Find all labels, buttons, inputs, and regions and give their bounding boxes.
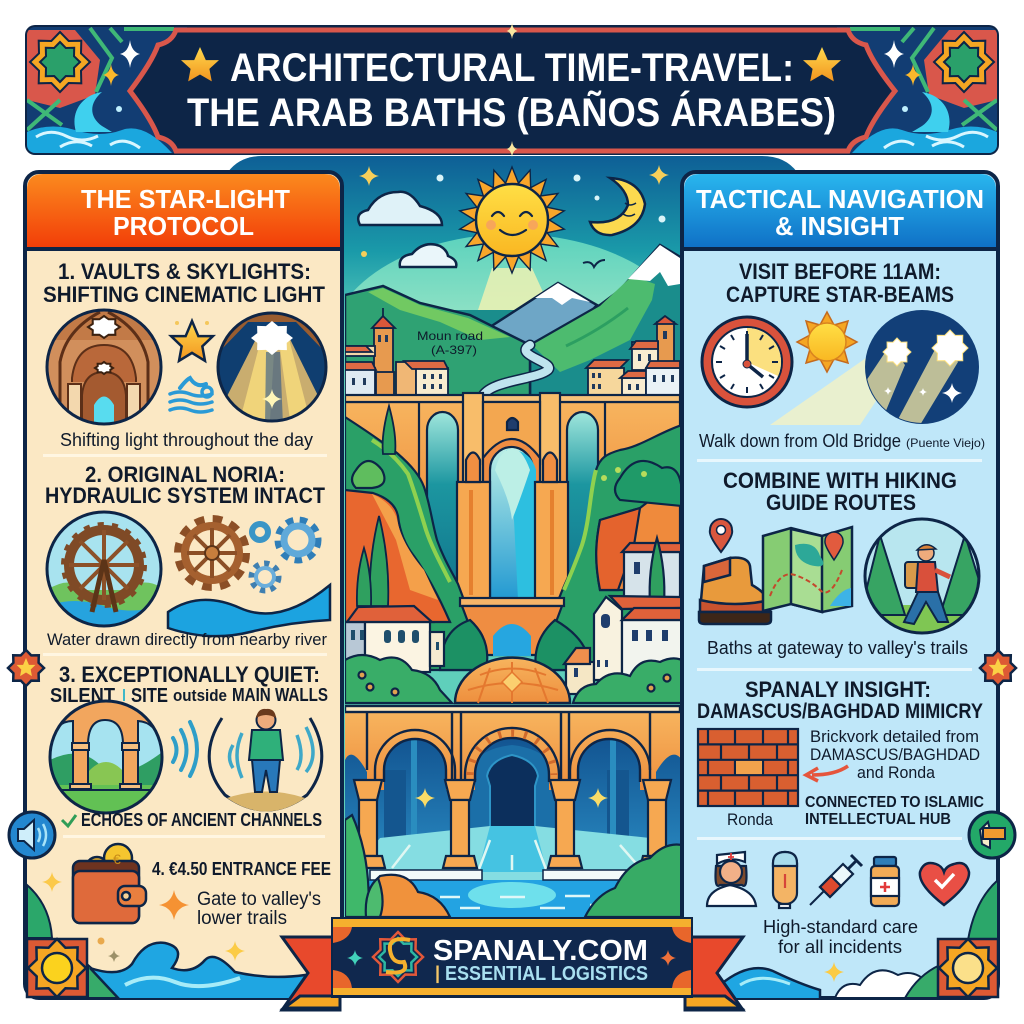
medallion: direction sign icon (969, 812, 1015, 858)
banner plate (331, 917, 693, 998)
title text: THE ARAB BATHS (BAÑOS ÁRABES) (187, 89, 836, 135)
section 4 text: 4. €4.50 ENTRANCE FEE (152, 859, 331, 879)
road label: (A-397) (431, 343, 477, 357)
sky sparkles (359, 165, 669, 257)
insight notes: DAMASCUS/BAGHDAD (810, 745, 980, 764)
section heading: hiking guide routes: COMBINE WITH HIKING (723, 468, 957, 493)
insight notes (805, 727, 984, 828)
icon: clock (702, 317, 792, 407)
section heading: visit before 11am: CAPTURE STAR-BEAMS (726, 282, 954, 307)
section 2 heading: HYDRAULIC SYSTEM INTACT (45, 483, 325, 508)
section heading: spanaly insight (697, 677, 983, 723)
section 3 heading: SILENT (50, 685, 115, 707)
caption 1: Shifting light throughout the day (60, 430, 313, 450)
section 2 heading (45, 462, 325, 508)
section 3 heading: MAIN WALLS (232, 685, 328, 705)
town right (586, 316, 680, 398)
caption: high-standard care: High-standard care (763, 917, 918, 937)
icon: hiker in forest (860, 519, 990, 635)
section 3 heading: outside (173, 686, 227, 705)
sunlight glow (353, 236, 640, 310)
panel header: THE STAR-LIGHT (81, 184, 290, 214)
icon: noria wheel (47, 512, 165, 630)
icon: sound waves (173, 722, 197, 776)
icon: vault interior (47, 310, 161, 429)
title plaque (130, 30, 895, 151)
section 1 heading (43, 259, 326, 307)
road label: Moun road (417, 329, 483, 343)
panel frame (682, 172, 998, 998)
icon: listening person (209, 709, 322, 812)
banner sparkles (347, 950, 676, 966)
icon: light beams in vault (215, 312, 330, 425)
section heading: hiking guide routes (723, 468, 957, 515)
section 3 heading: 3. EXCEPTIONALLY QUIET: (59, 662, 320, 687)
foreground plants (345, 815, 682, 917)
caption: old bridge: Walk down from Old Bridge (699, 431, 901, 451)
section 3 heading: SITE (131, 685, 168, 707)
panel frame (25, 172, 342, 998)
white stars and bird (436, 174, 666, 267)
icon: wallet with coins: € (113, 851, 121, 867)
section heading: spanaly insight: SPANALY INSIGHT: (745, 677, 931, 702)
town windows left (352, 335, 442, 389)
section heading: visit before 11am (726, 259, 954, 307)
caption: high-standard care (763, 917, 918, 957)
insight notes: Brickvork detailed from (810, 727, 979, 746)
sparkle (824, 962, 844, 982)
icon: hiking boot (699, 558, 771, 624)
title stars (181, 47, 841, 81)
center illustration: Ronda bridge and Arab Baths (228, 156, 797, 920)
insight notes: INTELLECTUAL HUB (805, 811, 951, 828)
section heading: spanaly insight: DAMASCUS/BAGHDAD MIMICRY (697, 700, 983, 723)
section 4 text: lower trails (197, 908, 287, 929)
crescent moon (590, 178, 645, 235)
icon: trail map (763, 527, 852, 612)
right mountain (530, 245, 682, 400)
icon: brick wall (698, 729, 798, 806)
light beam reaching panel (770, 358, 880, 425)
icon: location pin (710, 519, 732, 552)
caption: gateway: Baths at gateway to valley's trails (707, 638, 968, 658)
header corner ornament left (27, 27, 187, 153)
town windows right (592, 331, 674, 390)
title banner (25, 23, 999, 157)
spanaly logo (373, 932, 423, 982)
bushes (345, 655, 682, 703)
icon: water waves (170, 378, 212, 412)
panel header (25, 174, 342, 251)
Puente Nuevo bridge (345, 393, 680, 620)
left cliff (345, 417, 480, 670)
icon: gears (180, 521, 317, 590)
icon: syringe (810, 855, 862, 905)
ribbon tails (282, 937, 743, 1010)
caption: high-standard care: for all incidents (778, 937, 902, 957)
icon: IV bag (773, 852, 797, 908)
right cliff (556, 424, 680, 672)
arrow: brick origin (806, 766, 848, 781)
title text: ARCHITECTURAL TIME-TRAVEL: (230, 46, 794, 90)
icon: wallet with coins (73, 844, 146, 923)
cypress trees (357, 406, 395, 606)
panel header (682, 174, 998, 251)
corner ornament and waves (27, 885, 305, 1000)
section 1 heading: 1. VAULTS & SKYLIGHTS: (58, 259, 311, 284)
arcade arches (345, 706, 682, 790)
icon: star (171, 321, 213, 361)
section heading: visit before 11am: VISIT BEFORE 11AM: (739, 259, 941, 284)
baths interior (345, 739, 680, 917)
houses right (564, 596, 682, 694)
icon: river (168, 585, 330, 636)
left mountain (345, 286, 530, 400)
corner ornaments (333, 927, 691, 988)
section 4 text (152, 859, 331, 929)
section 4 text: Gate to valley's (197, 889, 321, 910)
valley backdrop (454, 310, 514, 324)
columns (351, 780, 674, 868)
icon: heart with check (920, 863, 969, 905)
section heading: hiking guide routes: GUIDE ROUTES (766, 490, 916, 515)
wall caption: Ronda (727, 810, 773, 829)
lower bridge base (440, 598, 590, 670)
section 3 heading (50, 662, 328, 707)
panel: tactical navigation and insight (682, 172, 998, 1000)
header corner ornament right (837, 27, 997, 153)
brand text: SPANALY.COM (433, 935, 648, 967)
plaque sparkles (506, 23, 518, 157)
brand text: | (435, 963, 440, 983)
corner ornament, waves and cloud (720, 880, 998, 1000)
brand text (433, 935, 648, 985)
medallion: speaker icon (9, 812, 55, 858)
dome (455, 658, 570, 703)
panel header: TACTICAL NAVIGATION (696, 184, 984, 214)
panel: the star-light protocol (25, 172, 342, 1000)
footer banner (282, 917, 743, 1010)
sky with arched top (228, 156, 797, 920)
icon: arches landscape (48, 700, 165, 815)
section 1 heading: SHIFTING CINEMATIC LIGHT (43, 282, 326, 307)
center mountain (490, 283, 597, 345)
icon: nurse (707, 852, 756, 906)
caption: old bridge: (Puente Viejo) (906, 436, 985, 450)
corner tile sun left (27, 939, 87, 997)
icon: sun (797, 312, 857, 372)
corner tile sun right (938, 939, 998, 997)
title text (187, 46, 836, 135)
winding road (482, 345, 549, 397)
panel header: & INSIGHT (775, 211, 904, 241)
sparkles (42, 872, 245, 962)
medallion: star left (8, 650, 44, 686)
icon: skylight star beams (860, 310, 979, 425)
insight notes: and Ronda (857, 763, 936, 782)
section 2 heading: 2. ORIGINAL NORIA: (85, 462, 285, 487)
cloud large (358, 192, 442, 225)
icon: medicine bottle (871, 857, 899, 906)
panel header: PROTOCOL (113, 211, 254, 241)
caption 2: Water drawn directly from nearby river (47, 630, 327, 649)
medallion: star right (980, 650, 1016, 686)
smiling sun (458, 167, 566, 273)
insight notes: CONNECTED TO ISLAMIC (805, 794, 984, 811)
road label (418, 332, 482, 356)
cloud small (400, 244, 456, 267)
houses left (345, 606, 444, 672)
brand text: ESSENTIAL LOGISTICS (445, 963, 648, 985)
town left (345, 308, 448, 396)
caption 3 with checkmark: ECHOES OF ANCIENT CHANNELS (81, 810, 322, 830)
